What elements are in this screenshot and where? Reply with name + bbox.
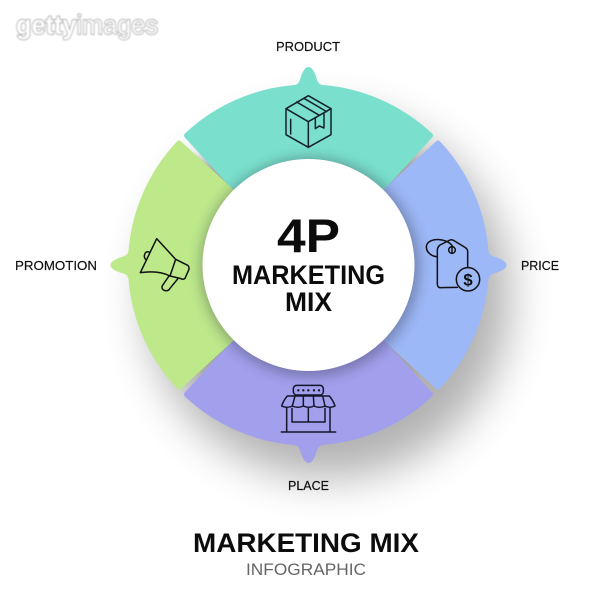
center heading: 4P <box>277 209 340 262</box>
label: product: PRODUCT <box>276 39 340 54</box>
icon: price tag <box>426 240 480 291</box>
icon: megaphone <box>140 239 189 291</box>
panel: place segment <box>186 305 430 460</box>
center heading <box>232 209 385 317</box>
label: price: PRICE <box>521 258 559 273</box>
gap shadow between segments <box>161 118 457 414</box>
icon: storefront <box>281 385 336 432</box>
center heading: MARKETING <box>232 260 385 290</box>
icon: price tag: $ <box>463 270 473 289</box>
center heading: MIX <box>285 287 332 317</box>
icon: box <box>286 96 331 147</box>
panel: product segment <box>186 70 430 225</box>
panel: promotion segment <box>113 143 268 387</box>
watermark: gettyimages: gettyimages <box>16 10 158 40</box>
center circle <box>202 159 414 371</box>
panel: price segment <box>348 143 504 387</box>
inner shadow on segments <box>200 157 420 377</box>
bottom subtitle: INFOGRAPHIC <box>246 560 366 579</box>
label: promotion: PROMOTION <box>15 258 97 273</box>
label: place: PLACE <box>288 478 329 493</box>
bottom title: MARKETING MIX <box>193 528 419 558</box>
drop shadow of ring <box>146 114 510 478</box>
